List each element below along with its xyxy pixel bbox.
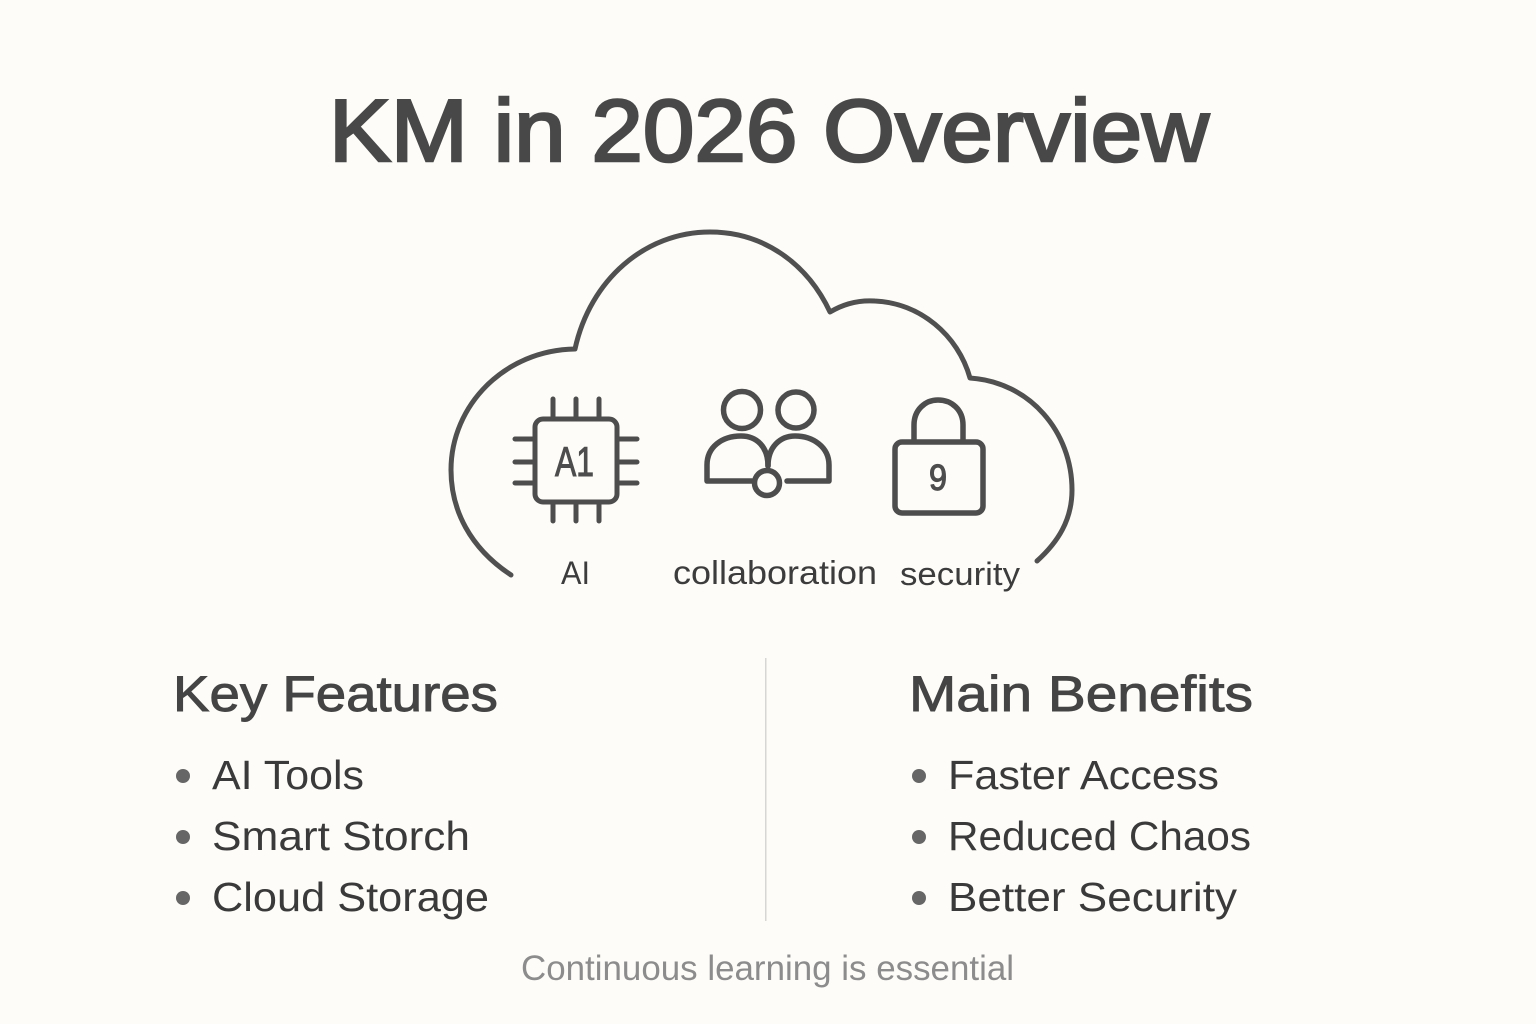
footer note: Continuous learning is essential [521, 949, 1014, 988]
icon: security padlock: 9 [929, 457, 947, 498]
icon: AI chip: A1 [555, 438, 594, 485]
list: main benefits items: Faster Access [948, 752, 1219, 798]
list: main benefits items: Better Security [948, 874, 1238, 920]
panel: key features [173, 666, 498, 920]
panel: main benefits [909, 666, 1253, 920]
label: collaboration: collaboration [673, 554, 877, 591]
list: key features items: AI Tools [212, 752, 364, 798]
list: key features items: Cloud Storage [212, 874, 489, 920]
divider [765, 658, 766, 921]
title: KM in 2026 Overview [329, 81, 1209, 180]
list: main benefits items [912, 752, 1251, 920]
list: key features items [176, 752, 489, 920]
icon: collaboration people [707, 392, 829, 496]
heading: key features: Key Features [173, 666, 498, 722]
icon: security padlock [895, 400, 983, 513]
cloud outline [451, 232, 1072, 575]
list: key features items: Smart Storch [212, 813, 470, 859]
icon: AI chip [515, 399, 637, 521]
label: AI: AI [561, 555, 590, 591]
heading: main benefits: Main Benefits [909, 666, 1253, 722]
list: main benefits items: Reduced Chaos [948, 813, 1251, 859]
label: security: security [900, 556, 1020, 592]
